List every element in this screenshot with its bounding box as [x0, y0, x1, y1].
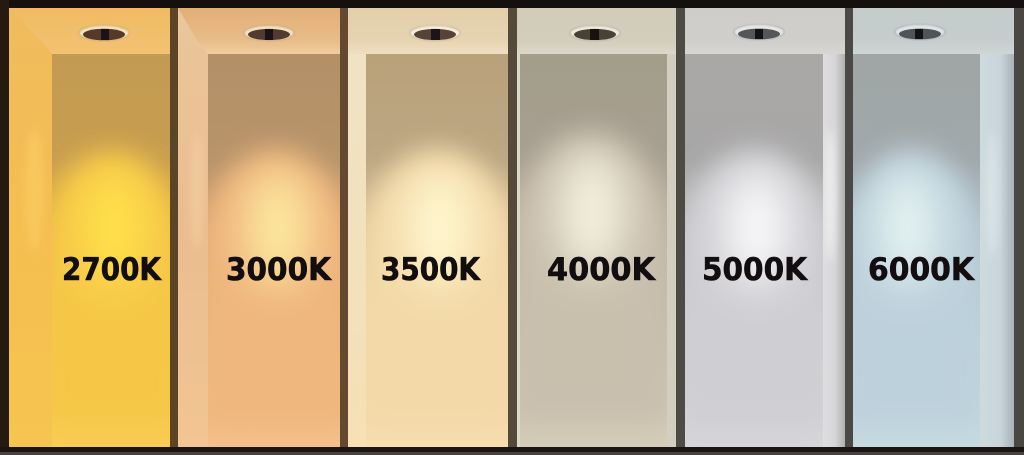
- ceiling: [348, 8, 508, 54]
- ceiling: [517, 8, 676, 54]
- side wall: [9, 8, 52, 447]
- wall light streak: [825, 129, 835, 261]
- back wall with light pool: [208, 54, 340, 447]
- panel: 3000K: [178, 8, 352, 447]
- back wall with light pool: [842, 54, 982, 447]
- panel: 3500K: [348, 8, 518, 447]
- wall light streak: [25, 128, 43, 252]
- side wall: [823, 8, 845, 447]
- back wall with light pool: [52, 54, 170, 447]
- wall light streak: [190, 130, 204, 250]
- side wall: [348, 8, 366, 447]
- panel: 6000K: [842, 8, 1014, 447]
- downlight: [244, 26, 294, 40]
- label: 2700K: [62, 252, 162, 288]
- wall light streak: [986, 133, 998, 257]
- side wall: [980, 8, 1014, 447]
- downlight: [79, 26, 129, 40]
- label: 3500K: [381, 252, 481, 288]
- ceiling: [685, 8, 845, 54]
- label: 4000K: [547, 252, 656, 288]
- downlight: [734, 24, 784, 40]
- ceiling: [853, 8, 1014, 54]
- downlight: [570, 26, 620, 40]
- side wall: [178, 8, 208, 447]
- side walls: [517, 8, 676, 447]
- label: 3000K: [226, 252, 332, 288]
- panel: 4000K: [510, 8, 676, 447]
- label: 6000K: [868, 252, 975, 288]
- panel: 2700K: [9, 8, 184, 447]
- back wall with light pool: [510, 54, 670, 447]
- back wall with light pool: [685, 54, 823, 447]
- downlight: [895, 24, 945, 40]
- ceiling: [9, 8, 170, 54]
- label: 5000K: [702, 252, 808, 288]
- back wall with light pool: [366, 54, 508, 447]
- panel: 5000K: [678, 8, 845, 447]
- downlight: [410, 26, 460, 40]
- ceiling: [178, 8, 340, 54]
